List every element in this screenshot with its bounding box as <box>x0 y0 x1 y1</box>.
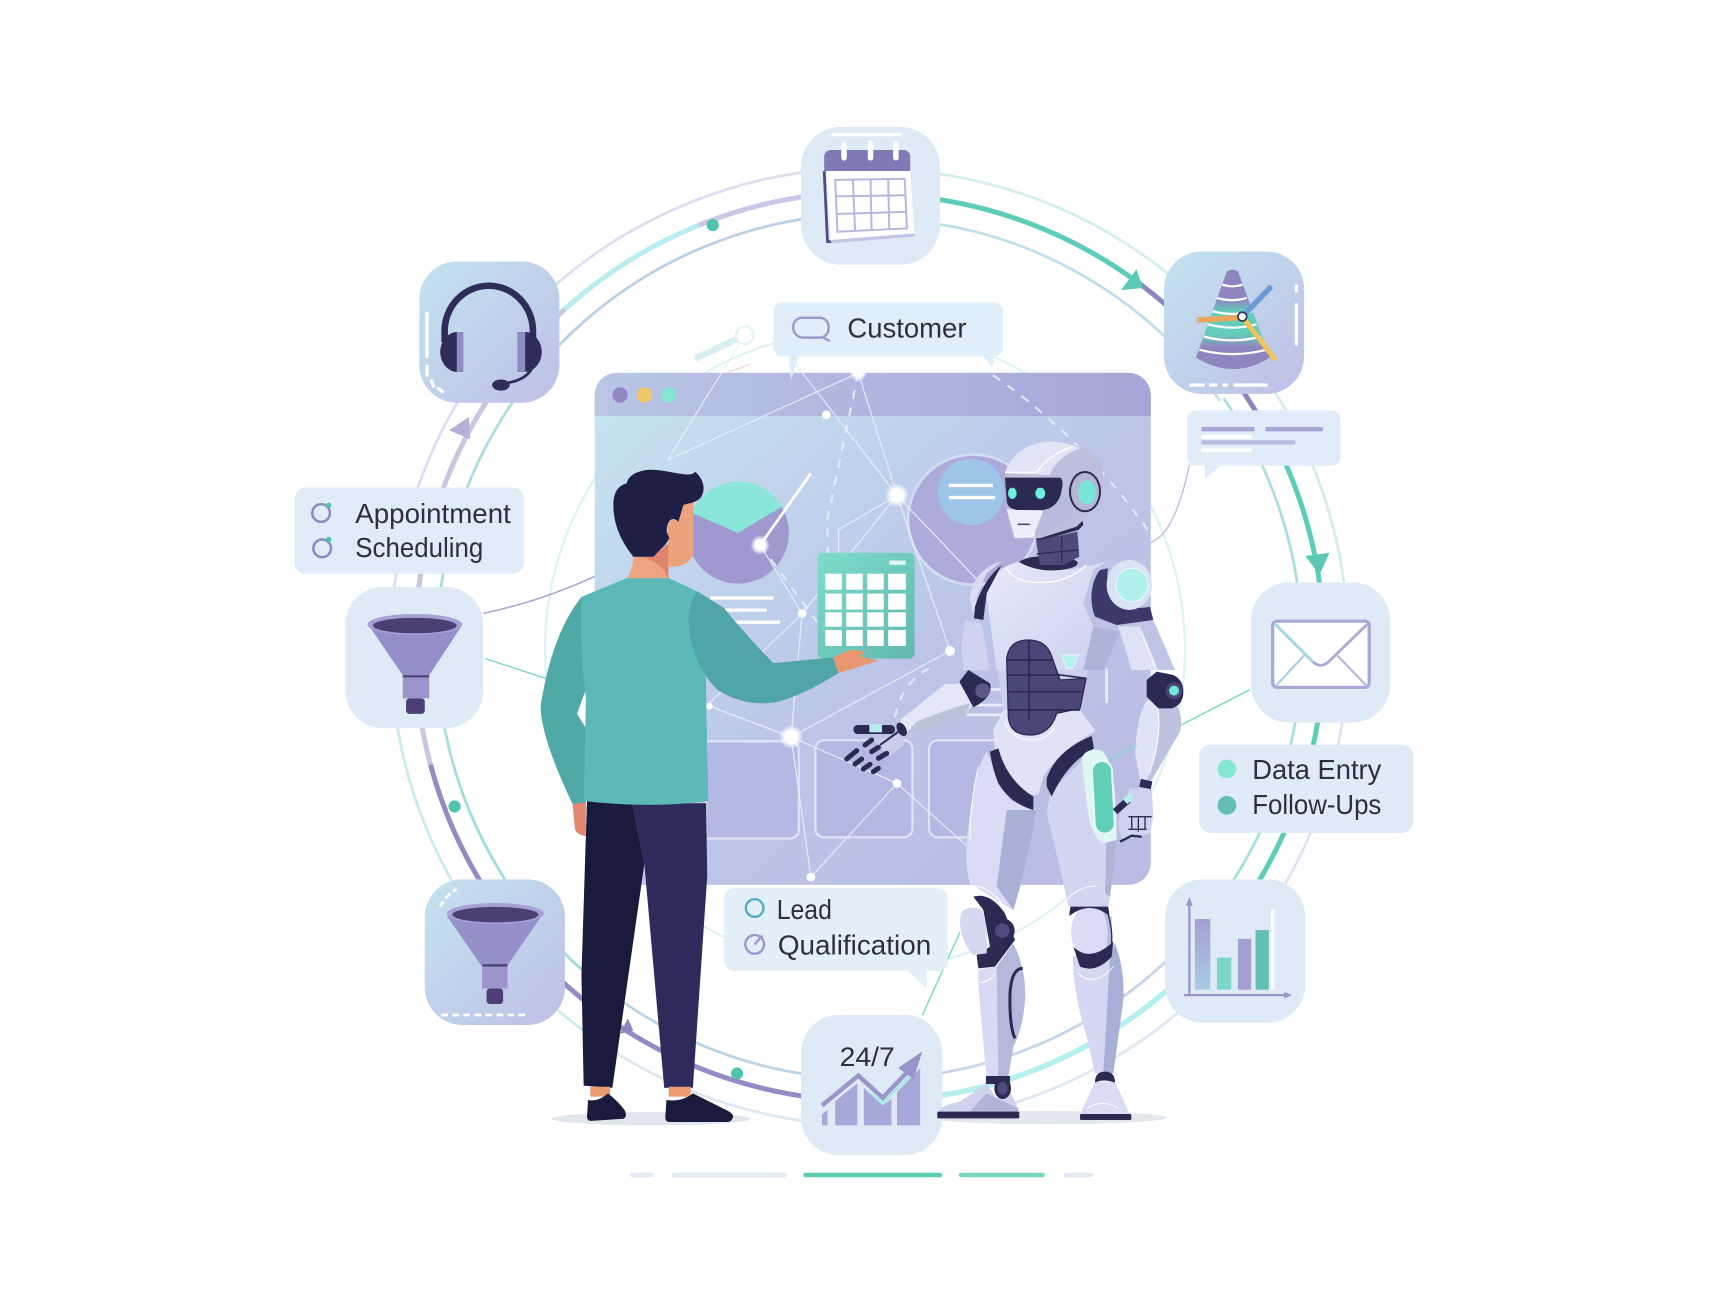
left foot <box>937 1083 1018 1117</box>
left shin <box>978 943 1025 1077</box>
right upper arm <box>1117 620 1175 670</box>
24/7 label: 24/7 <box>840 1042 895 1072</box>
back arm <box>541 597 586 804</box>
icon tile: bar chart <box>1165 879 1305 1023</box>
ear module <box>1069 471 1101 512</box>
left forearm <box>900 683 972 735</box>
person <box>541 470 878 1125</box>
text: lead qualification: Lead <box>777 894 832 925</box>
right forearm <box>1135 700 1181 780</box>
ankles <box>590 1087 610 1097</box>
torso <box>581 578 708 805</box>
right hand <box>1118 788 1153 840</box>
right elbow <box>1147 672 1183 708</box>
icon tile: funnel lower <box>425 879 565 1025</box>
right thigh <box>1047 748 1117 907</box>
hips and thighs <box>966 660 1117 910</box>
left hand <box>573 801 586 836</box>
pelvis <box>993 710 1095 795</box>
icon tile: email <box>1251 583 1390 723</box>
right shoulder <box>1091 568 1153 625</box>
face plate <box>1007 509 1043 538</box>
chest <box>987 562 1107 670</box>
icon tile: 24/7 growth <box>801 1015 942 1155</box>
upper body <box>962 442 1175 670</box>
head <box>613 470 704 582</box>
icon tile: funnel upper <box>345 587 483 728</box>
icon tile: cone chart <box>1164 252 1304 394</box>
chest core <box>1007 640 1086 735</box>
dome <box>1005 442 1103 538</box>
label: appointment scheduling <box>295 488 524 574</box>
label: blank message bubble <box>1187 410 1341 479</box>
left shoulder <box>969 561 1002 620</box>
screen text lines behind robot <box>967 669 1107 715</box>
left knee <box>973 896 1015 968</box>
text: appointment scheduling <box>355 498 511 563</box>
left thigh <box>966 752 1037 910</box>
pie chart <box>687 482 789 584</box>
text: appointment scheduling: Appointment <box>355 498 511 529</box>
icon tile: calendar <box>801 127 940 265</box>
text: lead qualification <box>777 894 931 960</box>
face <box>668 502 693 567</box>
abdomen filler <box>997 660 1090 713</box>
network graph <box>668 335 1147 882</box>
raised arm <box>688 591 839 703</box>
left elbow <box>959 670 991 707</box>
text: appointment scheduling: Scheduling <box>355 532 483 563</box>
neck <box>1035 510 1083 542</box>
bottom progress segments <box>632 1173 1091 1177</box>
icon tile: headset <box>419 261 559 403</box>
hand <box>833 650 878 673</box>
label: customer <box>773 302 1003 380</box>
right shin <box>1073 943 1124 1073</box>
top-left network node <box>736 327 754 344</box>
cheek <box>1035 492 1073 537</box>
legs <box>581 801 644 1088</box>
label: lead qualification <box>724 888 948 989</box>
left hand <box>873 735 905 757</box>
label: data entry and follow-ups <box>1199 745 1413 833</box>
icon: speech bubble <box>793 318 830 341</box>
chat circle <box>908 455 1038 585</box>
orbit rings <box>391 168 1348 1125</box>
device <box>1082 750 1117 843</box>
panel: browser window <box>595 335 1151 885</box>
robot <box>847 442 1183 1124</box>
text: data entry <box>1252 754 1382 820</box>
text: lead qualification: Qualification <box>778 929 931 960</box>
text: data entry: Data Entry <box>1252 754 1382 785</box>
icon: lead <box>745 899 764 954</box>
chart text lines <box>711 598 780 622</box>
lower legs <box>937 895 1131 1120</box>
chest core and arms <box>847 640 1183 843</box>
hair <box>613 470 704 557</box>
visor <box>1005 478 1063 510</box>
right foot <box>1080 1082 1130 1115</box>
icon: appointment <box>312 503 332 557</box>
text: data entry: Follow-Ups <box>1252 789 1381 820</box>
shoes <box>587 1093 626 1121</box>
green calendar card <box>818 553 915 659</box>
text: customer: Customer <box>847 313 967 344</box>
ring arrows and dots <box>449 219 1329 1080</box>
right knee <box>1071 906 1111 958</box>
lower cards <box>706 740 1021 838</box>
thin connector lines <box>483 335 1250 1015</box>
hip bands <box>990 748 1033 810</box>
chest badge <box>1062 655 1078 668</box>
neck <box>625 543 668 582</box>
